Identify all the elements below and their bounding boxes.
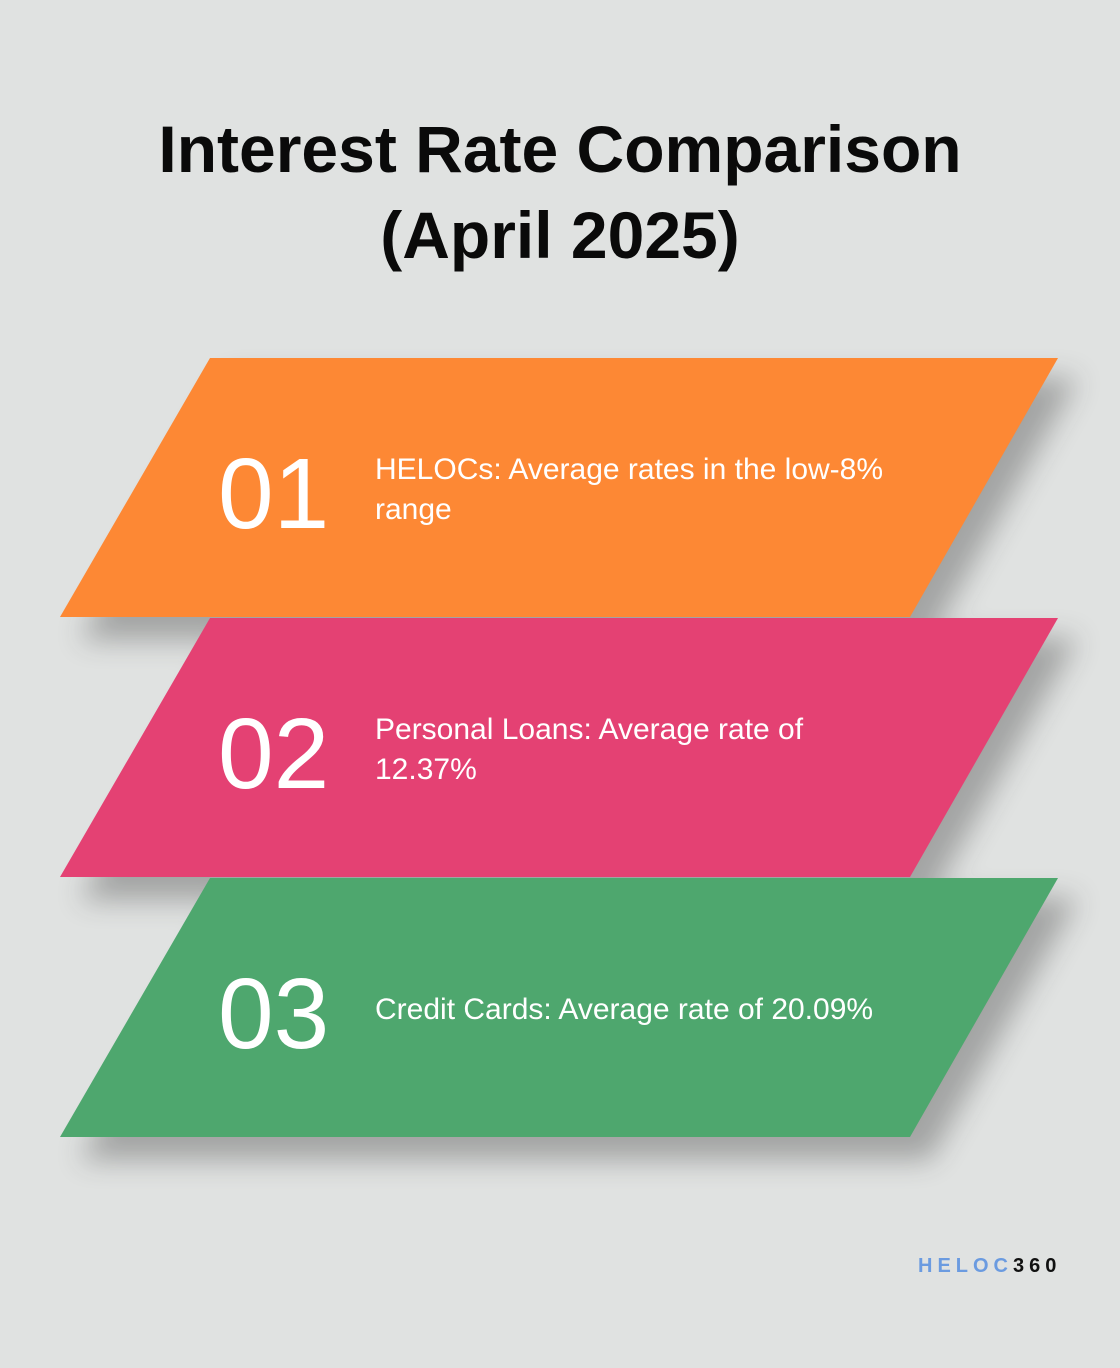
title: Interest Rate Comparison: [158, 112, 962, 186]
panel: 02 Personal Loans: [60, 618, 1058, 877]
number 03: 03: [218, 958, 329, 1070]
number 01: 01: [218, 438, 329, 550]
number 02: 02: [218, 698, 329, 810]
panel: 01 HELOCs: [60, 358, 1058, 617]
title: [158, 112, 962, 272]
title: (April 2025): [380, 198, 740, 272]
panel: 03 Credit Cards: [60, 878, 1058, 1137]
panel shadows: [80, 378, 1078, 1160]
logo: HELOC360: [918, 1255, 1061, 1277]
text 01: HELOCs: Average rates in the low-8% range: [375, 453, 883, 526]
text 03: Credit Cards: Average rate of 20.09%: [375, 993, 873, 1026]
text 02: Personal Loans: Average rate of 12.37%: [375, 713, 803, 786]
